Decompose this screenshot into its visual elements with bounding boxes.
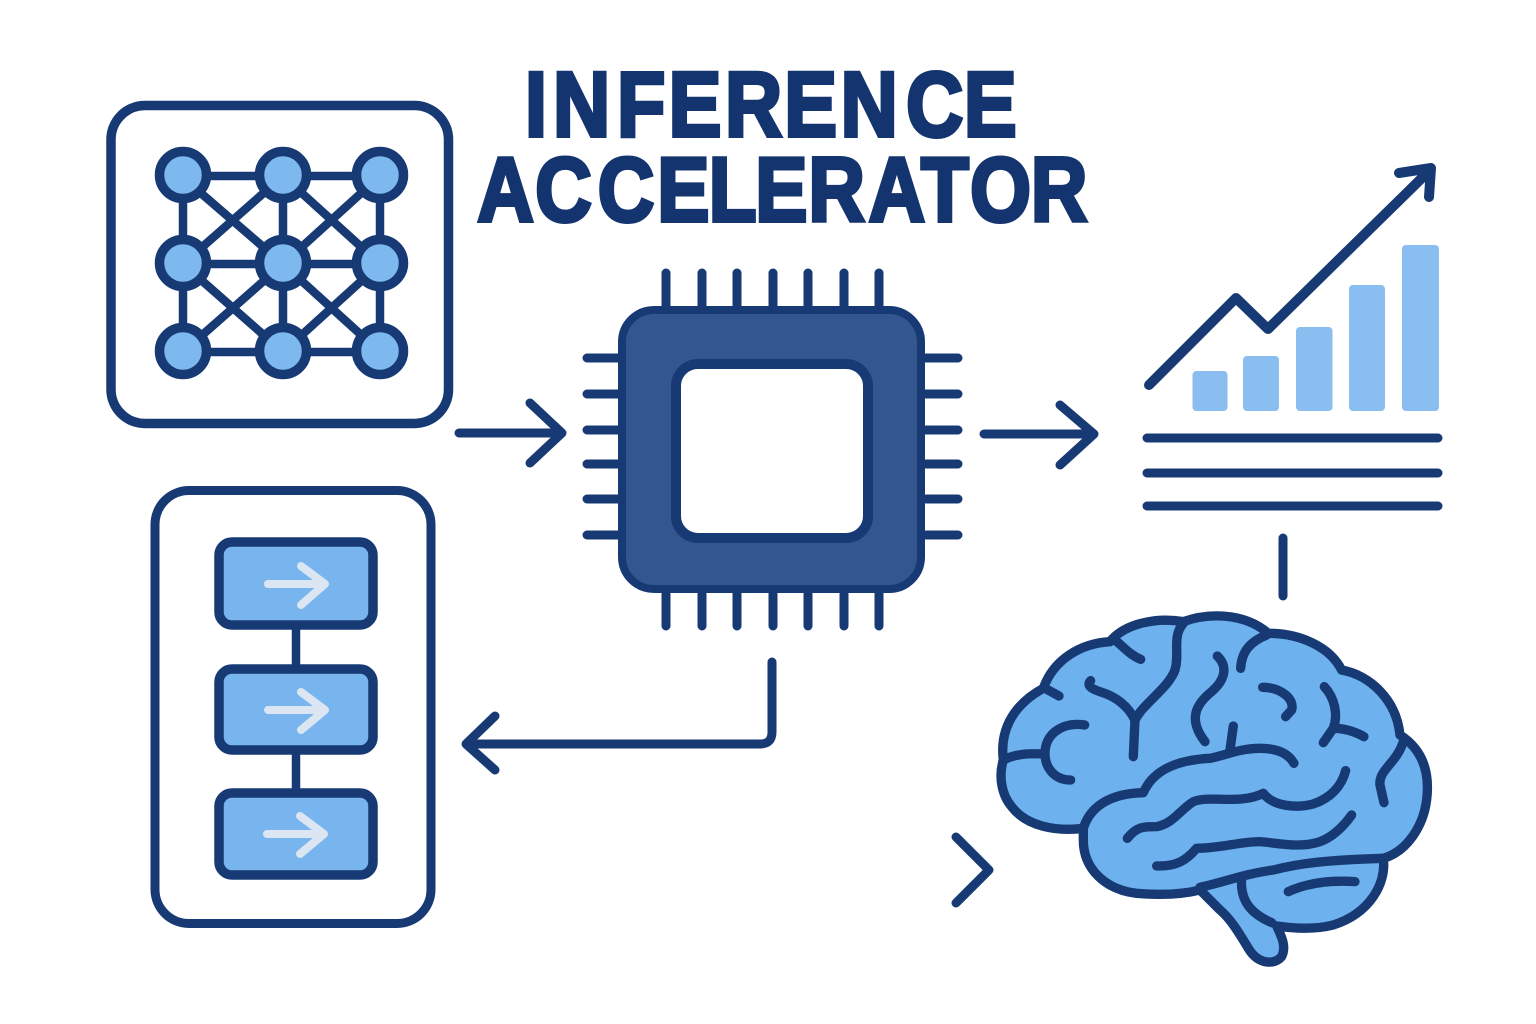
step 1: [219, 542, 373, 625]
chip core: [676, 364, 868, 538]
connector: chart to brain: [1278, 538, 1288, 596]
bars: [1192, 245, 1439, 411]
arrowhead: chevron to brain: [956, 837, 989, 903]
arrow: chip back to pipeline: [466, 662, 772, 770]
network nodes: [160, 152, 404, 374]
title: ACCELERATOR: [477, 138, 1087, 240]
brain folds: [1003, 623, 1403, 923]
panel: neural network: [111, 106, 448, 424]
title: INFERENCE: [525, 53, 1017, 156]
bar chart: [1147, 168, 1439, 506]
step 3: [219, 793, 373, 875]
panel: pipeline: [155, 490, 431, 924]
brain silhouette: [1001, 616, 1427, 962]
icon: processor chip: [587, 273, 958, 626]
network connections: [183, 176, 380, 352]
title: [477, 53, 1087, 240]
chip body: [622, 310, 921, 589]
icon: brain: [1001, 616, 1427, 962]
connectors: [292, 625, 300, 793]
step 2: [219, 669, 373, 750]
arrow: network to chip: [459, 403, 562, 463]
arrow: chip to chart: [984, 405, 1094, 465]
baseline lines: [1147, 438, 1438, 506]
chip pins: [587, 273, 958, 626]
trend arrow: [1149, 168, 1431, 385]
